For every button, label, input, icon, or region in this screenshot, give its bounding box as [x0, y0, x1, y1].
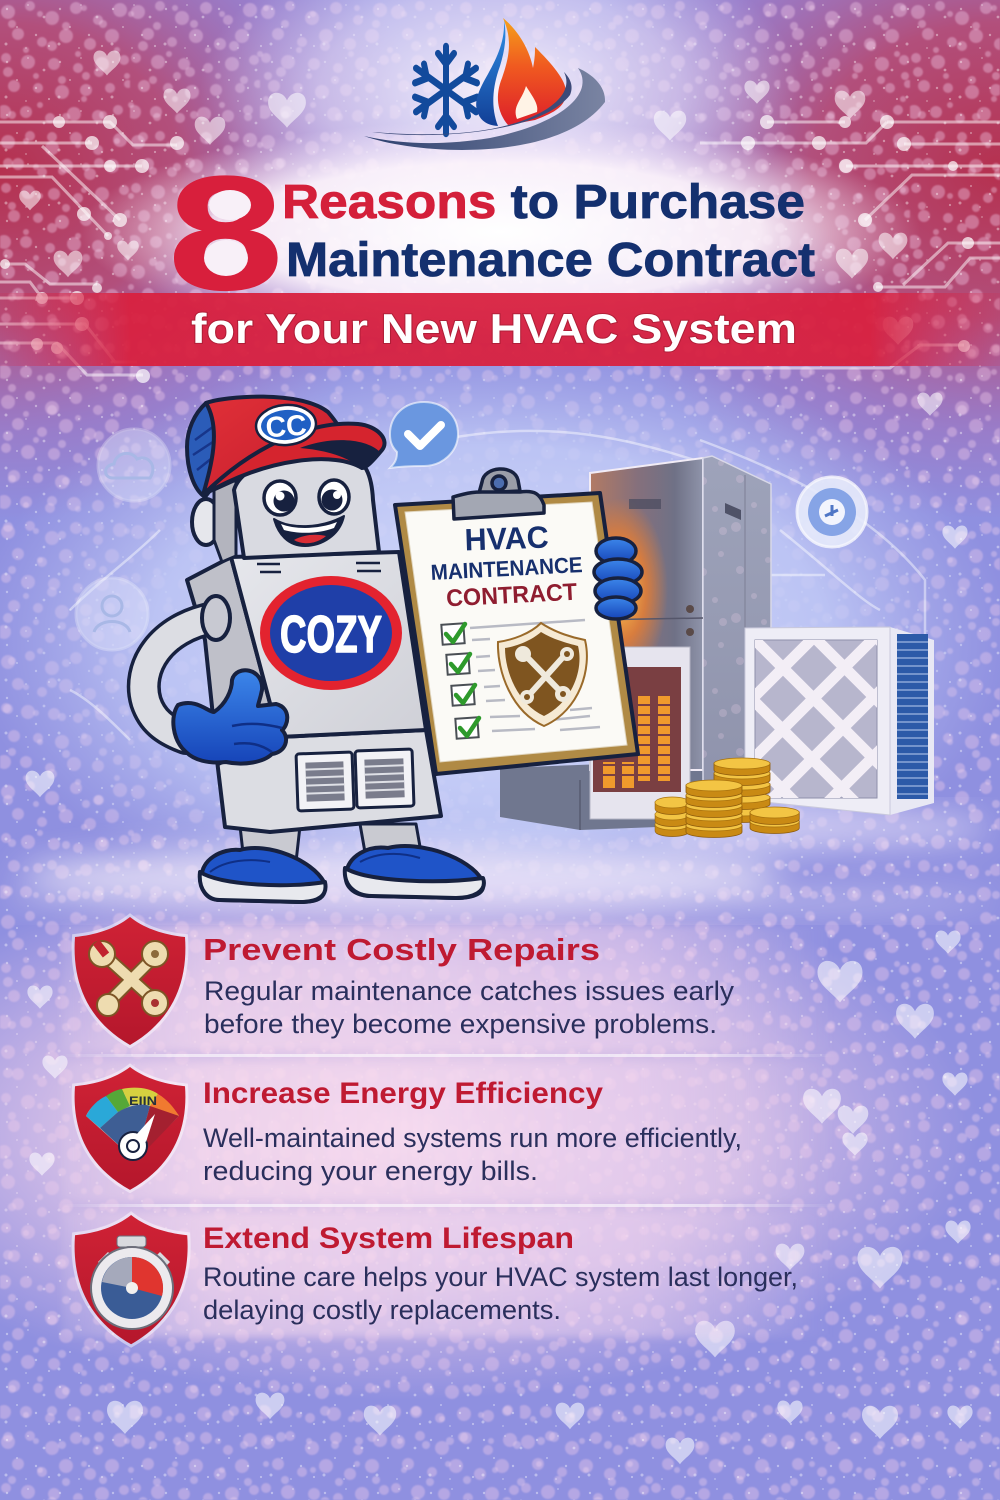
- icon: shield wrenches: [75, 917, 185, 1045]
- description: Regular maintenance catches issues early: [204, 976, 735, 1006]
- left coin stack: [655, 797, 690, 836]
- title banner: [0, 293, 1000, 366]
- cap: [187, 397, 385, 497]
- legs: [240, 824, 422, 862]
- body vents: [257, 563, 381, 572]
- clipboard heading: MAINTENANCE: [430, 552, 583, 585]
- clipboard: [395, 469, 638, 774]
- heading: Extend System Lifespan: [203, 1222, 574, 1255]
- body logo: [260, 576, 402, 690]
- grille left: [296, 752, 354, 811]
- heading: Increase Energy Efficiency: [203, 1077, 603, 1110]
- eye right: [319, 480, 349, 514]
- icon: shield gauge: EIIN: [129, 1094, 157, 1108]
- clipboard heading: HVAC: [464, 520, 549, 557]
- icon: dial bubble: [797, 477, 867, 547]
- clipboard board: [395, 493, 638, 774]
- cabinet side: [703, 456, 771, 790]
- circuit lines left: [0, 115, 184, 383]
- description: Routine care helps your HVAC system last longer,: [203, 1262, 798, 1292]
- furnace cabinet: [500, 456, 771, 830]
- cap visor: [203, 424, 385, 495]
- front coin stack: [686, 780, 742, 838]
- gold coins: [655, 758, 799, 838]
- reason 1: prevent costly repairs: [75, 917, 735, 1045]
- description: Well-maintained systems run more efficiently,: [203, 1123, 742, 1153]
- unit front: [745, 627, 890, 815]
- description: [204, 976, 735, 1039]
- logo: [364, 18, 605, 150]
- mascot: [144, 397, 484, 902]
- mouth: [274, 516, 344, 546]
- lower body: [217, 730, 441, 832]
- arm: [144, 596, 230, 738]
- speech bubble check: [390, 402, 458, 468]
- cap crown: [203, 397, 340, 495]
- circuit lines right: [700, 115, 1000, 368]
- heading: Prevent Costly Repairs: [203, 932, 600, 967]
- side louvers: [897, 634, 928, 799]
- clipboard paper: [405, 502, 627, 762]
- filter unit: [744, 626, 934, 816]
- cap: CC: [265, 410, 308, 444]
- clipboard heading: CONTRACT: [445, 579, 578, 612]
- icon: blue flame: [476, 20, 505, 126]
- icon: red orange flame: [498, 18, 566, 125]
- panel rows background: [60, 925, 840, 1337]
- reason 2: increase energy efficiency: [75, 1067, 742, 1190]
- right coin stack: [750, 807, 799, 834]
- right shoe: [346, 846, 483, 898]
- reason 3: extend system lifespan: [75, 1215, 798, 1344]
- description: before they become expensive problems.: [204, 1009, 717, 1039]
- background swirl lines: [70, 431, 925, 740]
- body front panel: [231, 552, 426, 737]
- icon: cloud bubble: [98, 429, 170, 501]
- eye left: [264, 481, 296, 515]
- icon: flame core: [516, 86, 537, 119]
- clipboard shield: [498, 623, 587, 726]
- checklist: [441, 620, 600, 739]
- rear coin stack: [714, 758, 770, 822]
- cabinet vents: [629, 499, 661, 509]
- ear: [192, 499, 220, 545]
- big number 8: 8: [168, 144, 283, 324]
- description: delaying costly replacements.: [203, 1295, 561, 1325]
- icon: shield stopwatch: [75, 1215, 188, 1344]
- clipboard clip: [453, 469, 544, 519]
- thumbs-up glove: [173, 670, 287, 764]
- shoes: [200, 846, 484, 902]
- filter lattice: [755, 640, 877, 798]
- icon: shield gauge: [75, 1067, 185, 1190]
- right glove: [594, 538, 642, 619]
- logo swoosh inner: [372, 72, 572, 135]
- description: [203, 1123, 742, 1186]
- cabinet front: [590, 458, 703, 770]
- description: reducing your energy bills.: [203, 1156, 538, 1186]
- title line 2: Maintenance Contract: [286, 234, 815, 287]
- title: [168, 144, 815, 324]
- head: [192, 451, 379, 562]
- icon: person bubble: [76, 578, 148, 650]
- heater unit: [590, 647, 690, 819]
- description: [203, 1262, 798, 1325]
- cap mesh: [187, 402, 235, 497]
- body logo: COZY: [280, 606, 382, 664]
- body side panel: [187, 557, 279, 764]
- unit side: [890, 627, 934, 815]
- snow ground: [0, 808, 1000, 914]
- left shoe: [202, 848, 325, 902]
- cap badge: [255, 403, 317, 447]
- grille right: [355, 749, 414, 808]
- face: [234, 451, 379, 558]
- icon: snowflake: [415, 46, 477, 134]
- cabinet base: [500, 760, 710, 830]
- clipboard heading: [430, 520, 583, 612]
- logo swoosh outer: [364, 68, 605, 150]
- title line 1: Reasons to Purchase: [282, 176, 805, 229]
- banner text: for Your New HVAC System: [191, 305, 797, 352]
